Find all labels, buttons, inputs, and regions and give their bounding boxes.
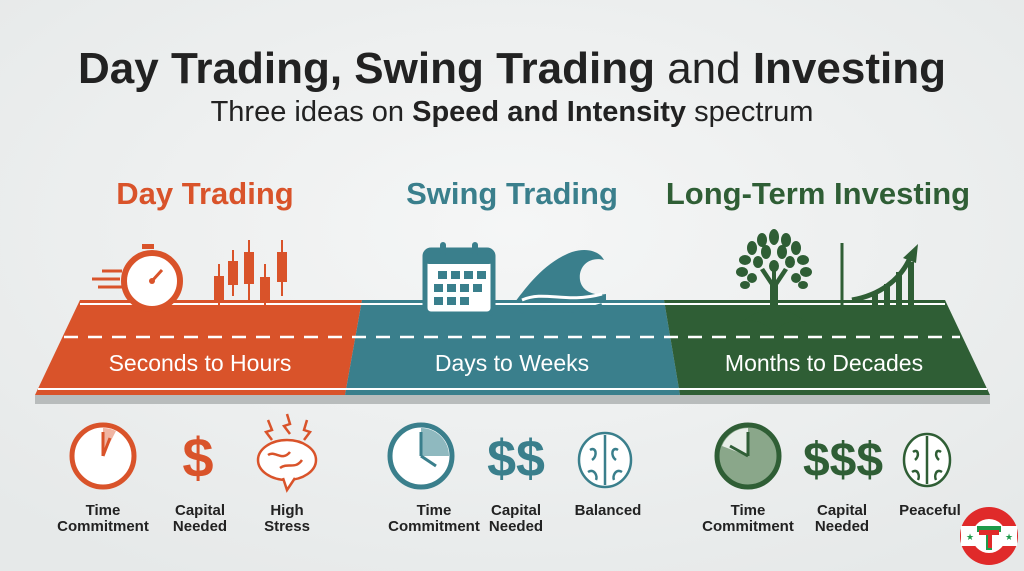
road label: days: Days to Weeks bbox=[435, 350, 589, 376]
label: High bbox=[270, 502, 304, 519]
icon: orange clock bbox=[72, 425, 134, 487]
logo bbox=[960, 507, 1018, 565]
icon: stopwatch bbox=[92, 244, 180, 309]
heading: long-term investing: Long-Term Investing bbox=[666, 176, 970, 211]
road label: months: Months to Decades bbox=[725, 350, 923, 376]
label: Needed bbox=[489, 518, 543, 535]
road label: seconds: Seconds to Hours bbox=[109, 350, 291, 376]
label: Capital bbox=[175, 502, 225, 519]
label: Commitment bbox=[57, 518, 149, 535]
label: Needed bbox=[815, 518, 869, 535]
label: Commitment bbox=[702, 518, 794, 535]
icon: dollar: $ bbox=[182, 426, 214, 489]
icon: candlesticks bbox=[215, 240, 286, 318]
label: Balanced bbox=[575, 502, 641, 519]
label: Stress bbox=[264, 518, 310, 535]
subtitle: Three ideas on Speed and Intensity spectrum bbox=[211, 96, 813, 128]
long-term metrics bbox=[702, 425, 961, 535]
label: Capital bbox=[817, 502, 867, 519]
icon: wave bbox=[515, 250, 606, 312]
swing trading metrics bbox=[388, 425, 641, 535]
label: Peaceful bbox=[899, 502, 961, 519]
road spectrum bbox=[35, 300, 990, 404]
icon: calendar bbox=[425, 242, 493, 314]
icon: peaceful brain bbox=[904, 434, 950, 486]
title: Day Trading, Swing Trading and Investing bbox=[78, 44, 946, 93]
icon: double dollar: $$ bbox=[487, 430, 545, 488]
logo: ★ bbox=[966, 532, 974, 542]
icon: tree bbox=[736, 229, 812, 332]
label: Time bbox=[417, 502, 451, 519]
label: Time bbox=[86, 502, 120, 519]
day trading metrics bbox=[57, 414, 316, 535]
logo: ★ bbox=[1005, 532, 1013, 542]
label: Capital bbox=[491, 502, 541, 519]
heading: swing trading: Swing Trading bbox=[406, 176, 618, 211]
label: Needed bbox=[173, 518, 227, 535]
label: Commitment bbox=[388, 518, 480, 535]
icon: balanced brain bbox=[579, 433, 631, 487]
icon: growth chart bbox=[842, 243, 920, 307]
icon: triple dollar: $$$ bbox=[803, 434, 883, 487]
heading: day trading: Day Trading bbox=[116, 176, 294, 211]
icon: teal clock bbox=[390, 425, 452, 487]
icon: stressed brain bbox=[258, 414, 316, 490]
label: Time bbox=[731, 502, 765, 519]
icon: green clock bbox=[717, 425, 779, 487]
